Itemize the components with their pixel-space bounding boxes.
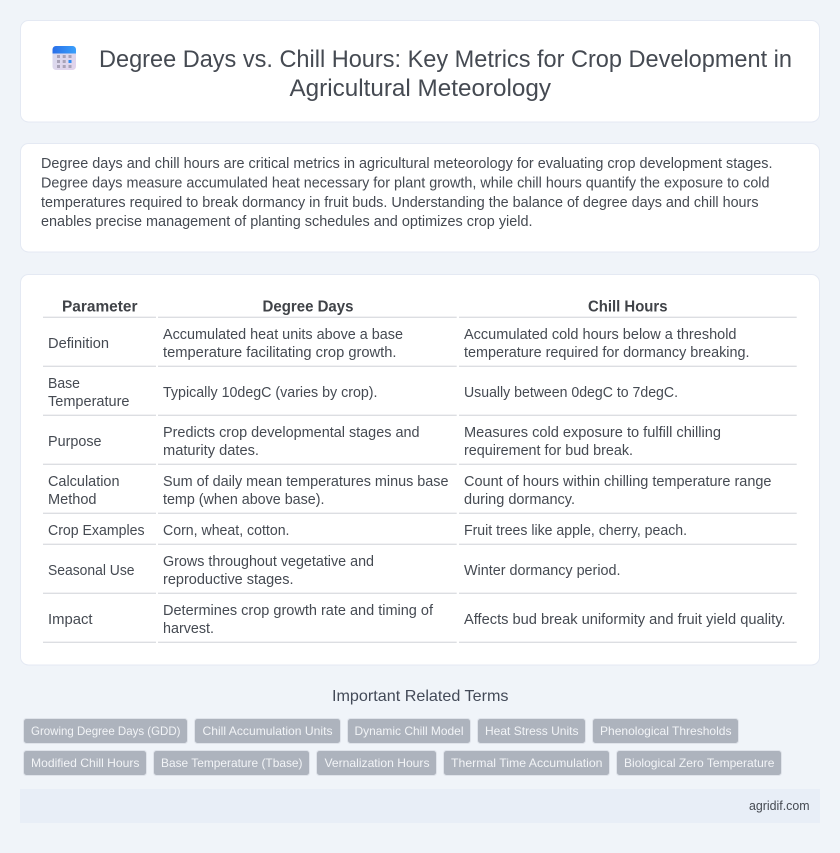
row: impact: Affects bud break uniformity and fruit yield quality.: [464, 612, 786, 628]
tags: related terms: Thermal Time Accumulation: [451, 756, 602, 770]
tags: related terms: Phenological Thresholds: [600, 724, 732, 738]
footer: [20, 789, 820, 823]
table header row: Degree Days: [262, 298, 354, 316]
title: [99, 46, 792, 102]
panel: introduction: [20, 144, 820, 252]
row: impact: [48, 603, 786, 637]
table header row: [62, 298, 668, 316]
icon: calendar: [52, 46, 76, 70]
tags: related terms: Chill Accumulation Units: [202, 724, 332, 738]
row: crop examples: Crop Examples: [48, 523, 144, 539]
tags: related terms: Vernalization Hours: [324, 756, 430, 770]
footer: agridif.com: [749, 798, 810, 813]
text block: introduction: Degree days and chill hours are critical metrics in agricultural meteorology for evaluating crop development stages.: [41, 156, 772, 172]
row: definition: temperature facilitating crop growth.: [163, 345, 396, 361]
row: definition: Accumulated cold hours below a threshold: [464, 327, 736, 343]
row: impact: harvest.: [163, 621, 214, 637]
row: purpose: [48, 425, 721, 459]
tags: related terms: [24, 718, 782, 776]
row: definition: [48, 327, 750, 361]
row: purpose: maturity dates.: [163, 443, 259, 459]
row: seasonal use: Grows throughout vegetative and: [163, 554, 374, 570]
row: calculation method: temp (when above base).: [163, 492, 324, 508]
row: seasonal use: reproductive stages.: [163, 572, 294, 588]
row: definition: Accumulated heat units above a base: [163, 327, 403, 343]
tags: related terms: Modified Chill Hours: [31, 756, 140, 770]
row: seasonal use: Winter dormancy period.: [464, 563, 620, 579]
row: impact: Determines crop growth rate and timing of: [163, 603, 434, 619]
row: base temperature: Typically 10degC (varies by crop).: [163, 385, 378, 401]
row: definition: temperature required for dormancy breaking.: [464, 345, 750, 361]
panel: comparison table: [20, 274, 820, 665]
tags: related terms: Heat Stress Units: [485, 724, 578, 738]
heading: related terms: Important Related Terms: [332, 688, 508, 705]
row: purpose: Predicts crop developmental stages and: [163, 425, 420, 441]
row: seasonal use: [48, 554, 620, 588]
title: Agricultural Meteorology: [290, 75, 551, 102]
row: base temperature: Usually between 0degC to 7degC.: [464, 385, 678, 401]
row: impact: Impact: [48, 612, 93, 628]
tags: related terms: Dynamic Chill Model: [354, 724, 464, 738]
row: purpose: Purpose: [48, 434, 102, 450]
row: definition: Definition: [48, 336, 109, 352]
text block: introduction: Degree days measure accumulated heat necessary for plant growth, while chill hours quantify the exposure to cold: [41, 176, 770, 192]
table header row: Parameter: [62, 298, 138, 316]
tags: related terms: Growing Degree Days (GDD): [31, 724, 180, 738]
row: calculation method: [48, 474, 772, 508]
row: crop examples: Corn, wheat, cotton.: [163, 523, 290, 539]
row: calculation method: during dormancy.: [464, 492, 575, 508]
row: calculation method: Count of hours within chilling temperature range: [464, 474, 772, 490]
row: calculation method: Sum of daily mean temperatures minus base: [163, 474, 448, 490]
tags: related terms: Biological Zero Temperature: [624, 756, 775, 770]
row: calculation method: Calculation: [48, 474, 120, 490]
text block: introduction: enables precise management of planting schedules and optimizes crop yield.: [41, 214, 532, 230]
row: seasonal use: Seasonal Use: [48, 563, 134, 579]
text block: introduction: [41, 156, 772, 230]
row: crop examples: [48, 523, 687, 539]
row: base temperature: Temperature: [48, 394, 130, 410]
tags: related terms: Base Temperature (Tbase): [161, 756, 302, 770]
row: purpose: requirement for bud break.: [464, 443, 633, 459]
row: purpose: Measures cold exposure to fulfill chilling: [464, 425, 721, 441]
title: Degree Days vs. Chill Hours: Key Metrics for Crop Development in: [99, 46, 792, 73]
row: crop examples: Fruit trees like apple, cherry, peach.: [464, 523, 687, 539]
table header row: Chill Hours: [588, 298, 668, 316]
row: base temperature: Base: [48, 376, 80, 392]
panel: header: [20, 20, 820, 122]
text block: introduction: temperatures required to break dormancy in fruit buds. Understanding the balance of degree days and chill hours: [41, 195, 758, 211]
row: base temperature: [48, 376, 678, 410]
row: calculation method: Method: [48, 492, 96, 508]
